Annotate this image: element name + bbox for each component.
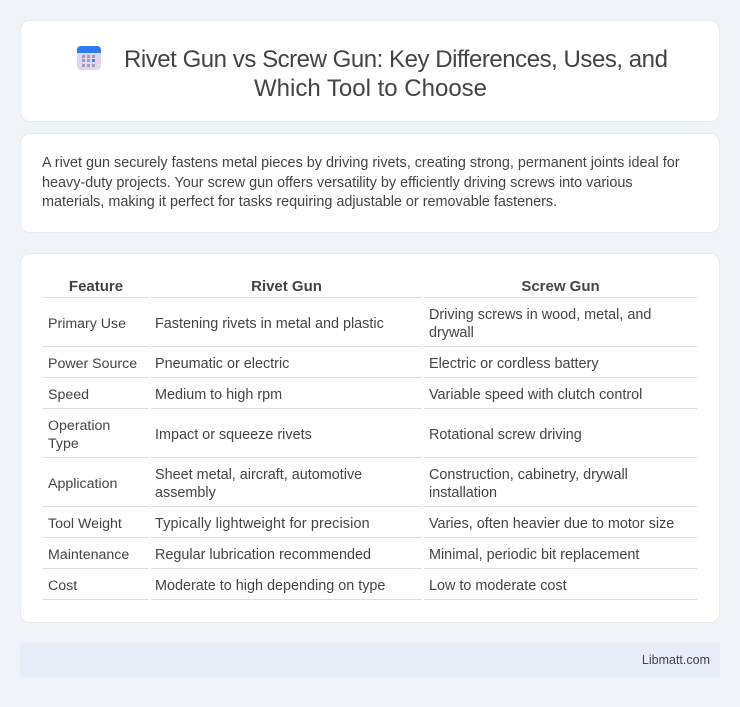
row: primary use: Fastening rivets in metal and plastic: [155, 316, 384, 332]
row: cost: Moderate to high depending on type: [155, 578, 385, 594]
table header row: Screw Gun: [521, 278, 600, 295]
row: operation type: Operation: [48, 418, 110, 434]
intro card: [20, 133, 720, 233]
row: application: installation: [429, 485, 497, 501]
row: power source: Power Source: [48, 356, 137, 372]
row: power source: [48, 356, 599, 372]
heading: Rivet Gun vs Screw Gun: Key Differences, Uses, and: [124, 46, 667, 73]
row: operation type: [48, 418, 582, 452]
row: cost: Cost: [48, 578, 77, 594]
footer bar: [20, 643, 720, 677]
intro text: heavy-duty projects. Your screw gun offers versatility by efficiently driving screws into various: [42, 174, 633, 190]
title card: [20, 20, 720, 122]
row: speed: Speed: [48, 387, 89, 403]
icon: calendar: [77, 46, 101, 70]
row: primary use: Primary Use: [48, 316, 126, 332]
row: primary use: drywall: [429, 325, 474, 341]
table header row: Feature: [69, 278, 123, 295]
row: speed: [48, 387, 642, 403]
row: speed: Medium to high rpm: [155, 387, 282, 403]
row: maintenance: [48, 547, 640, 563]
row: maintenance: Minimal, periodic bit replacement: [429, 547, 639, 563]
row: cost: [48, 578, 567, 594]
row: operation type: Impact or squeeze rivets: [155, 427, 312, 443]
row: primary use: [48, 307, 651, 341]
row: tool weight: Varies, often heavier due to motor size: [429, 516, 674, 532]
row: operation type: Type: [48, 436, 79, 452]
comparison table: [43, 278, 697, 600]
row: speed: Variable speed with clutch control: [429, 387, 642, 403]
heading: [124, 46, 667, 102]
row: application: assembly: [155, 485, 216, 501]
row: tool weight: [48, 516, 674, 532]
intro text: materials, making it perfect for tasks requiring adjustable or removable fasteners.: [42, 194, 557, 210]
row: maintenance: Regular lubrication recommended: [155, 547, 371, 563]
row: maintenance: Maintenance: [48, 547, 129, 563]
row: tool weight: Typically lightweight for precision: [155, 516, 370, 532]
row: application: Construction, cabinetry, drywall: [429, 467, 628, 483]
row: application: Application: [48, 476, 117, 492]
row: tool weight: Tool Weight: [48, 516, 122, 532]
row: application: Sheet metal, aircraft, automotive: [155, 467, 362, 483]
row: cost: Low to moderate cost: [429, 578, 567, 594]
row: application: [48, 467, 628, 501]
table header row: Rivet Gun: [251, 278, 322, 295]
heading: Which Tool to Choose: [254, 75, 487, 102]
table card: [20, 253, 720, 623]
row: power source: Pneumatic or electric: [155, 356, 289, 372]
row: power source: Electric or cordless battery: [429, 356, 599, 372]
intro text: A rivet gun securely fastens metal pieces by driving rivets, creating strong, permanent joints ideal for: [42, 155, 680, 171]
intro text: [42, 155, 680, 210]
row: primary use: Driving screws in wood, metal, and: [429, 307, 651, 323]
footer credit: Libmatt.com: [642, 653, 710, 667]
table header row: [69, 278, 600, 295]
row: operation type: Rotational screw driving: [429, 427, 582, 443]
